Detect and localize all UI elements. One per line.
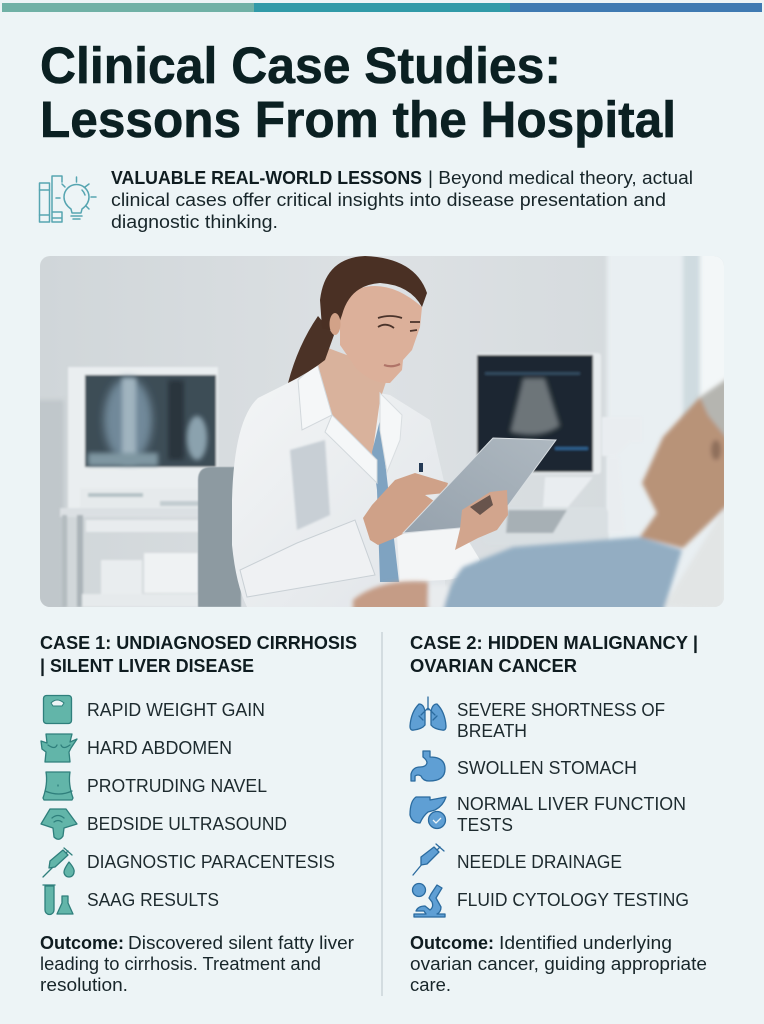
icon: protruding navel xyxy=(43,772,73,800)
case 2 heading: CASE 2: HIDDEN MALIGNANCY | xyxy=(410,633,698,653)
intro text: | Beyond medical theory, actual xyxy=(428,168,693,188)
divider xyxy=(382,632,383,996)
item: hard abdomen: HARD ABDOMEN xyxy=(87,737,232,758)
case 2 outcome: ovarian cancer, guiding appropriate xyxy=(410,954,707,974)
icon: liver with check xyxy=(410,797,446,828)
item: severe shortness of breath: BREATH xyxy=(457,720,527,741)
title: Clinical Case Studies: xyxy=(40,37,561,94)
item: normal liver function tests: NORMAL LIVER FUNCTION xyxy=(457,793,686,814)
hair back and ponytail xyxy=(288,316,334,383)
top colour bar xyxy=(2,3,762,12)
icon: microscope and cell xyxy=(412,884,445,917)
intro text: diagnostic thinking. xyxy=(111,212,278,232)
icon: weighing scale xyxy=(44,696,72,724)
coat fold shadow xyxy=(290,440,330,530)
right sleeve xyxy=(397,527,480,582)
icon: test tube and flask xyxy=(43,885,73,914)
case 2 outcome: Identified underlying xyxy=(499,933,672,953)
holding hand xyxy=(455,490,508,550)
case 1 heading xyxy=(40,633,357,676)
item: severe shortness of breath xyxy=(457,699,665,741)
hand with pen xyxy=(363,473,448,545)
case 1 outcome: Outcome: xyxy=(40,933,124,953)
icon: needle xyxy=(413,844,444,875)
case 1 heading: | SILENT LIVER DISEASE xyxy=(40,656,254,676)
item: normal liver function tests: TESTS xyxy=(457,814,513,835)
forearm sleeve xyxy=(240,520,375,597)
icon: hard abdomen xyxy=(41,734,77,762)
wall background xyxy=(40,256,608,607)
lapels xyxy=(298,363,402,483)
panel: case 1 xyxy=(40,633,357,995)
hair xyxy=(320,256,427,332)
icon: stomach xyxy=(411,751,445,781)
item: diagnostic paracentesis: DIAGNOSTIC PARACENTESIS xyxy=(87,851,335,872)
intro text xyxy=(111,168,693,232)
tablet xyxy=(403,438,556,533)
case 2 outcome: care. xyxy=(410,975,451,995)
item: bedside ultrasound: BEDSIDE ULTRASOUND xyxy=(87,813,287,834)
item: severe shortness of breath: SEVERE SHORTNESS OF xyxy=(457,699,665,720)
face xyxy=(340,286,422,383)
item: saag results: SAAG RESULTS xyxy=(87,889,219,910)
intro text: VALUABLE REAL-WORLD LESSONS xyxy=(111,168,422,188)
blurred window xyxy=(36,250,732,615)
blurred ultrasound machine xyxy=(476,353,608,534)
case 1 outcome xyxy=(40,933,354,995)
neck and chest xyxy=(318,345,386,457)
chair xyxy=(198,467,241,607)
icon: bedside ultrasound xyxy=(41,809,77,839)
case 2 heading xyxy=(410,633,698,676)
case 1 outcome: Discovered silent fatty liver xyxy=(128,933,354,953)
item: normal liver function tests xyxy=(457,793,686,835)
pen xyxy=(419,463,423,472)
item: protruding navel: PROTRUDING NAVEL xyxy=(87,775,267,796)
item: needle drainage: NEEDLE DRAINAGE xyxy=(457,851,622,872)
case 1 outcome: leading to cirrhosis. Treatment and xyxy=(40,954,321,974)
title xyxy=(40,37,676,148)
eyes and lips xyxy=(378,316,420,331)
item: rapid weight gain: RAPID WEIGHT GAIN xyxy=(87,699,265,720)
case 1 heading: CASE 1: UNDIAGNOSED CIRRHOSIS xyxy=(40,633,357,653)
case 2 outcome: Outcome: xyxy=(410,933,494,953)
ear xyxy=(330,313,340,335)
item: swollen stomach: SWOLLEN STOMACH xyxy=(457,757,637,778)
blurred patient xyxy=(353,378,728,612)
coat xyxy=(232,378,455,607)
title: Lessons From the Hospital xyxy=(40,91,676,148)
panel: case 2 xyxy=(410,633,707,995)
case 1 outcome: resolution. xyxy=(40,975,128,995)
item: fluid cytology testing: FLUID CYTOLOGY TESTING xyxy=(457,889,689,910)
case 2 heading: OVARIAN CANCER xyxy=(410,656,577,676)
photo: doctor with tablet and patient xyxy=(36,250,732,615)
blurred x-ray monitor and cart xyxy=(60,367,218,607)
intro text: clinical cases offer critical insights into disease presentation and xyxy=(111,190,666,210)
icon: lungs xyxy=(410,697,446,730)
scrubs xyxy=(372,420,399,582)
icon: syringe and drop xyxy=(43,848,74,877)
case 2 outcome xyxy=(410,933,707,995)
icon: books and light bulb xyxy=(40,176,96,222)
